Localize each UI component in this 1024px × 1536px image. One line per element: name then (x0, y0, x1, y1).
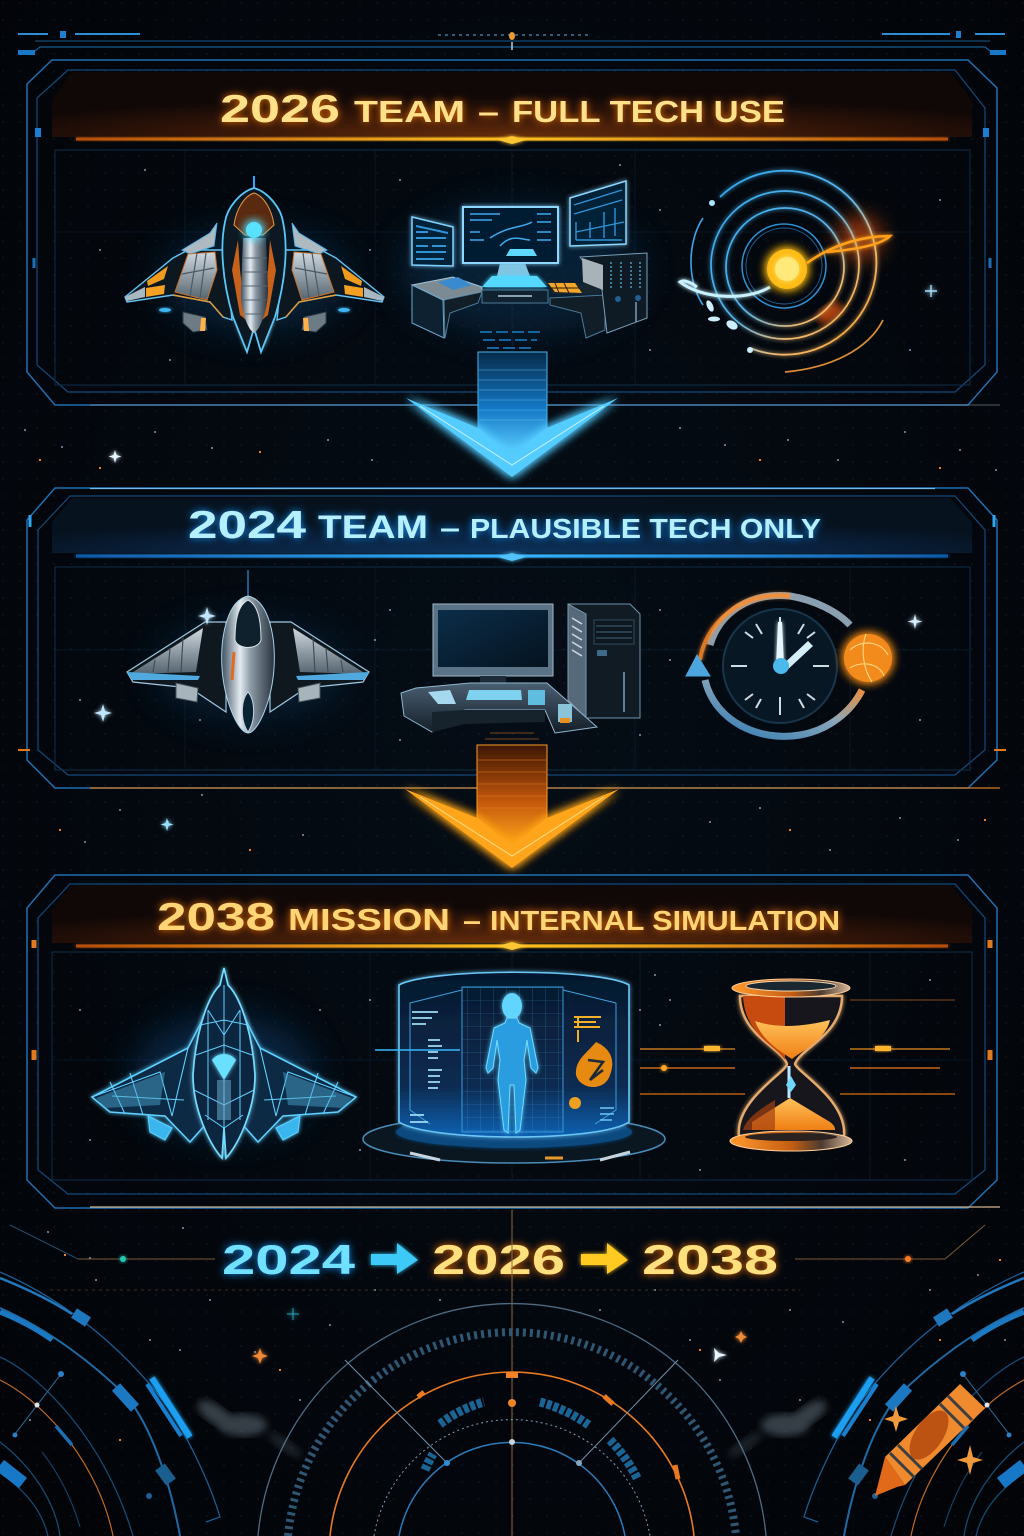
heading (157, 896, 840, 939)
top HUD bar (18, 31, 1006, 55)
decoration: left HUD rings (0, 1272, 220, 1536)
arrow: blue down arrow (406, 352, 618, 477)
stars: bright sparkles (108, 450, 747, 1364)
icon: crayon (875, 1384, 985, 1496)
desk (412, 276, 605, 348)
header top rule (68, 68, 955, 70)
panel header band (52, 498, 972, 553)
heading: – (440, 512, 460, 545)
decoration: central HUD rings (258, 1210, 766, 1536)
heading: INTERNAL SIMULATION (490, 905, 840, 936)
header top rule (90, 881, 935, 883)
arrow: yellow (581, 1243, 628, 1274)
year 2024: 2024 (222, 1236, 356, 1283)
heading (220, 88, 785, 131)
icon: clock with orbit (686, 595, 922, 736)
human figure (486, 993, 538, 1133)
panel: 2038 mission (27, 875, 1000, 1208)
header bottom rule (76, 136, 948, 144)
icon: holographic human simulation (363, 972, 665, 1163)
heading: TEAM (318, 509, 428, 545)
panel frame (18, 488, 1006, 788)
main monitor (463, 207, 558, 276)
heading: TEAM (354, 94, 465, 129)
icon: hourglass (730, 979, 852, 1151)
panel header band (52, 885, 972, 943)
heading: 2038 (157, 896, 275, 939)
monitor (433, 604, 553, 688)
heading: FULL TECH USE (512, 94, 785, 129)
computer tower (580, 253, 647, 333)
icon: desktop computer (401, 604, 640, 733)
panel frame (27, 60, 1000, 405)
year 2026: 2026 (432, 1236, 565, 1283)
year 2038: 2038 (642, 1236, 778, 1283)
icon: spaceship (125, 176, 384, 352)
heading (188, 504, 821, 547)
decoration: right HUD rings (804, 1272, 1024, 1536)
icon: futuristic workstation (400, 181, 647, 348)
arrow: blue (371, 1243, 418, 1274)
tower (568, 604, 640, 718)
heading: PLAUSIBLE TECH ONLY (470, 513, 821, 544)
heading: 2026 (220, 88, 340, 131)
decoration: nebula smoke (193, 1395, 831, 1461)
heading: – (463, 905, 481, 936)
icon: wireframe spaceship (92, 968, 356, 1158)
timeline: 2024 to 2026 to 2038 (10, 1225, 985, 1290)
base platform (363, 1115, 665, 1163)
right holographic screen (570, 181, 626, 246)
panel header band (52, 72, 972, 137)
header bottom rule (76, 553, 948, 561)
header bottom rule (76, 942, 948, 950)
cylindrical screen (399, 972, 629, 1137)
panel: 2024 team (18, 488, 1006, 788)
heading: 2024 (188, 504, 306, 547)
panel frame (27, 875, 1000, 1208)
panel: 2026 team (27, 60, 1000, 405)
heading: – (478, 94, 499, 129)
icon: solar orbit (680, 171, 937, 372)
streak lines (640, 1000, 955, 1094)
icon: spaceship (94, 570, 369, 733)
left holographic screen (412, 217, 453, 266)
keyboard desk (401, 683, 597, 733)
heading: MISSION (288, 902, 450, 937)
arrow: orange down arrow (405, 733, 619, 868)
